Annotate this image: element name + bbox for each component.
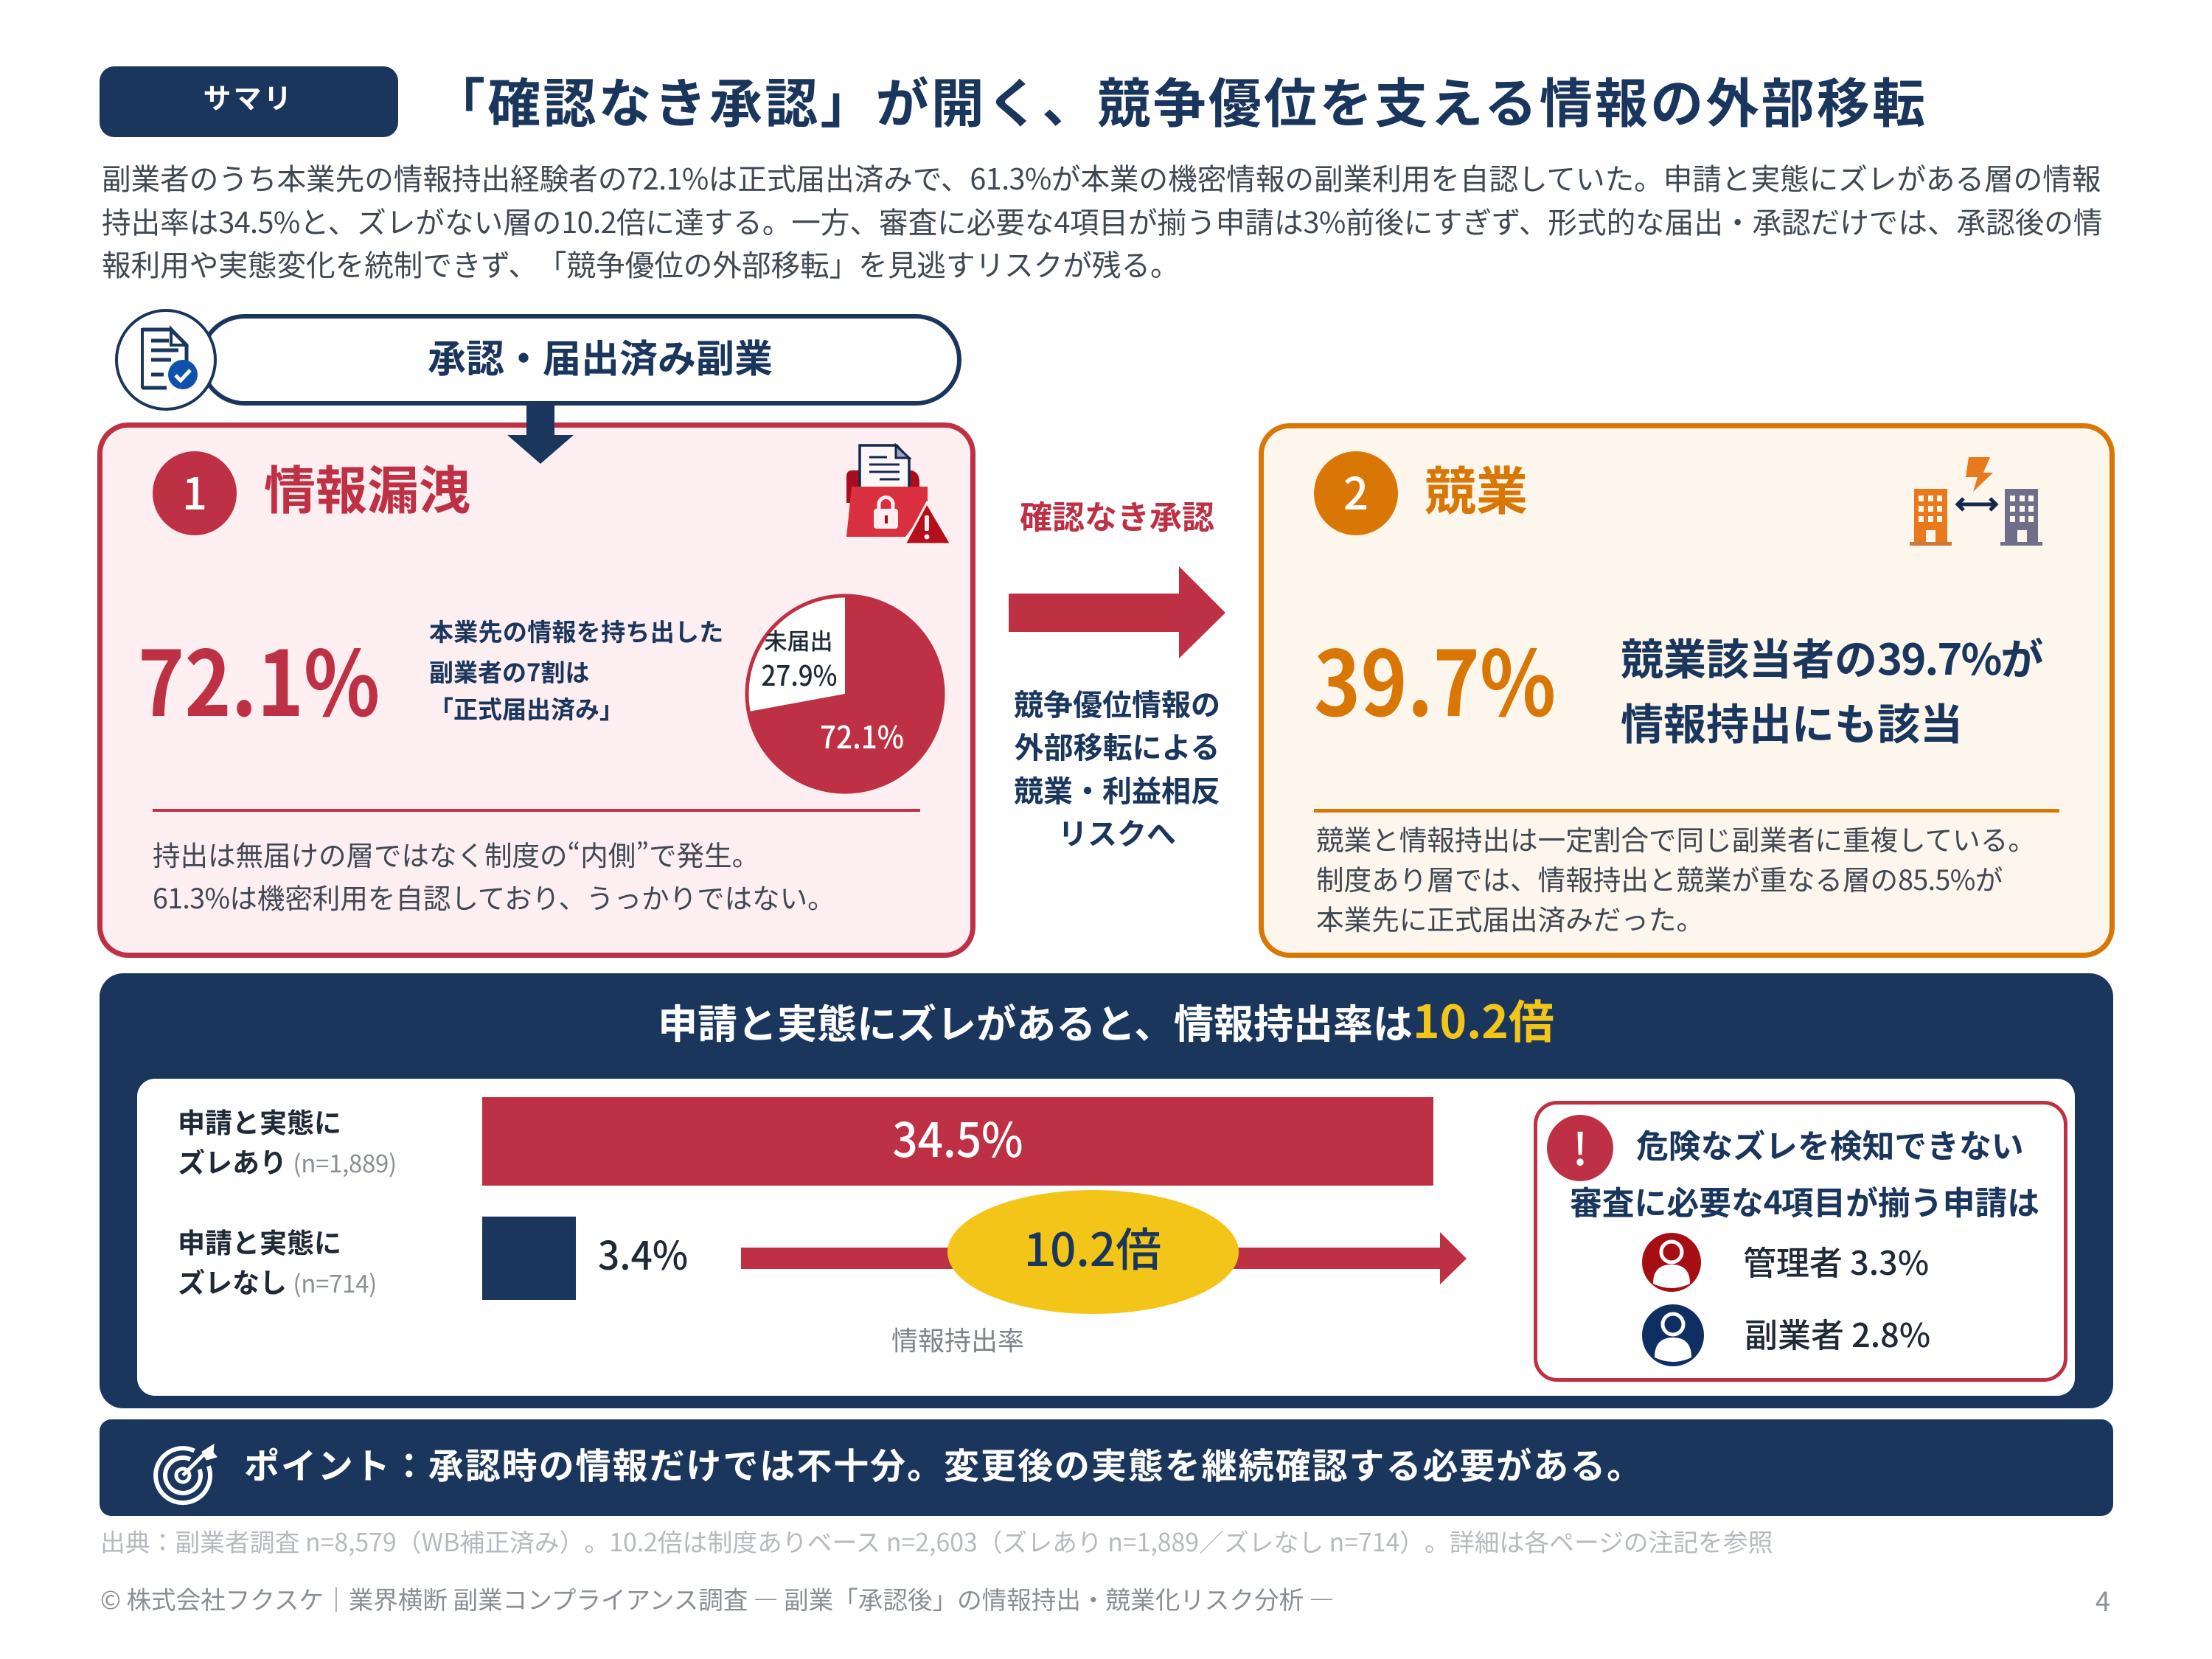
callout heading: 危険なズレを検知できない bbox=[1636, 1120, 2024, 1167]
connector text: 競争優位情報の bbox=[1014, 681, 1220, 724]
row label: with gap: 申請と実態に bbox=[178, 1101, 341, 1141]
big stat 72.1%: 72.1% bbox=[138, 612, 380, 742]
row label: with gap: ズレあり (n=1,889) bbox=[178, 1141, 397, 1180]
callout subheading: 審査に必要な4項目が揃う申請は bbox=[1570, 1177, 2039, 1224]
footer: © 株式会社フクスケ｜業界横断 副業コンプライアンス調査 — 副業「承認後」の情報持出・競業化リスク分析 — bbox=[100, 1580, 1334, 1616]
number badge 1: 1 bbox=[182, 459, 207, 523]
label: approval without confirmation: 確認なき承認 bbox=[1020, 491, 1214, 538]
pie label: not notified: 未届出 bbox=[764, 623, 833, 656]
connector text: 外部移転による bbox=[1015, 724, 1220, 767]
row label: with gap bbox=[178, 1101, 397, 1180]
note text: 競業と情報持出は一定割合で同じ副業者に重複している。 bbox=[1316, 818, 2036, 858]
panel heading: competing business: 競業 bbox=[1425, 451, 1528, 525]
icon: document with check bbox=[115, 309, 217, 411]
summary text block bbox=[102, 156, 2102, 285]
panel: key point bbox=[100, 1419, 2113, 1516]
icon: locked folder with warning bbox=[846, 442, 950, 543]
row label: without gap: 申請と実態に bbox=[178, 1221, 341, 1261]
arrow: ratio bbox=[741, 1232, 1467, 1284]
panel: gap comparison bbox=[100, 973, 2113, 1408]
panel: information leak bbox=[97, 422, 975, 958]
note text bbox=[1316, 818, 2036, 938]
stat: manager 3.3%: 管理者 3.3% bbox=[1743, 1237, 1929, 1284]
row label: without gap: ズレなし (n=714) bbox=[178, 1261, 377, 1301]
title: 「確認なき承認」が開く、競争優位を支える情報の外部移転 bbox=[432, 60, 1927, 138]
big stat 39.7%: 39.7% bbox=[1314, 612, 1556, 742]
pie label: not notified bbox=[761, 623, 838, 694]
number badge 2: 2 bbox=[1343, 459, 1368, 523]
connector text: 競業・利益相反 bbox=[1014, 768, 1220, 810]
bar: 34.5% bbox=[482, 1097, 1433, 1186]
note text: 61.3%は機密利用を自認しており、うっかりではない。 bbox=[153, 876, 835, 917]
icon: target bbox=[153, 1444, 218, 1506]
stat description: 本業先の情報を持ち出した bbox=[429, 613, 724, 648]
arrow: to panel 2 bbox=[1009, 566, 1225, 658]
pie label: not notified: 27.9% bbox=[761, 653, 838, 694]
stat description bbox=[429, 613, 724, 726]
pill: approved side jobs bbox=[199, 314, 961, 406]
stat description: 「正式届出済み」 bbox=[429, 690, 624, 726]
note text: 本業先に正式届出済みだった。 bbox=[1316, 897, 1704, 938]
number badge 1 bbox=[153, 451, 237, 535]
icon: two buildings with conflict bbox=[1910, 457, 2042, 546]
note text: 制度あり層では、情報持出と競業が重なる層の85.5%が bbox=[1316, 858, 2003, 898]
stat: side worker 2.8%: 副業者 2.8% bbox=[1745, 1309, 1930, 1357]
bar: 3.4% bbox=[482, 1217, 576, 1300]
stat description: 副業者の7割は bbox=[429, 653, 589, 689]
connector text: リスクへ bbox=[1058, 810, 1176, 853]
pie chart: notified share bbox=[745, 594, 945, 793]
pie label: notified: 72.1% bbox=[820, 713, 904, 758]
bar: 34.5%: 34.5% bbox=[892, 1103, 1023, 1171]
stat description: 情報持出にも該当 bbox=[1621, 690, 1963, 752]
number badge 2 bbox=[1314, 451, 1398, 535]
source note: 出典：副業者調査 n=8,579（WB補正済み）。10.2倍は制度ありベース n=2,603（ズレあり n=1,889／ズレなし n=714）。詳細は各ページの注記を参照 bbox=[100, 1523, 1773, 1559]
tag: summary: サマリ bbox=[203, 76, 294, 116]
icon: exclamation: ! bbox=[1573, 1114, 1587, 1178]
badge: 10.2x bbox=[947, 1190, 1239, 1314]
value: 3.4%: 3.4% bbox=[598, 1225, 688, 1281]
arrow: down to panel 1 bbox=[507, 406, 574, 464]
icon: side worker bbox=[1642, 1304, 1704, 1366]
point text: ポイント：承認時の情報だけでは不十分。変更後の実態を継続確認する必要がある。 bbox=[244, 1437, 1644, 1489]
callout: undetected gap bbox=[1534, 1101, 2067, 1382]
note text: 持出は無届けの層ではなく制度の“内側”で発生。 bbox=[153, 833, 759, 874]
page number: 4 bbox=[2096, 1581, 2110, 1619]
panel heading: information leak: 情報漏洩 bbox=[264, 450, 470, 524]
summary text block: 報利用や実態変化を統制できず、「競争優位の外部移転」を見逃すリスクが残る。 bbox=[102, 243, 1180, 285]
icon: manager bbox=[1642, 1233, 1701, 1292]
pill: approved side jobs: 承認・届出済み副業 bbox=[428, 328, 773, 383]
row label: without gap bbox=[178, 1221, 377, 1301]
panel: competing business bbox=[1259, 423, 2115, 958]
badge: 10.2x: 10.2倍 bbox=[1024, 1213, 1161, 1279]
white chart area bbox=[137, 1079, 2075, 1396]
summary text block: 持出率は34.5%と、ズレがない層の10.2倍に達する。一方、審査に必要な4項目が揃う申請は3%前後にすぎず、形式的な届出・承認だけでは、承認後の情 bbox=[102, 199, 2102, 242]
summary text block: 副業者のうち本業先の情報持出経験者の72.1%は正式届出済みで、61.3%が本業の機密情報の副業利用を自認していた。申請と実態にズレがある層の情報 bbox=[102, 156, 2101, 198]
icon: exclamation bbox=[1547, 1115, 1613, 1181]
heading: 10.2x: 申請と実態にズレがあると、情報持出率は10.2倍 bbox=[658, 985, 1554, 1051]
connector text bbox=[1014, 681, 1220, 853]
stat description bbox=[1621, 625, 2043, 752]
axis caption: 情報持出率 bbox=[891, 1320, 1024, 1358]
stat description: 競業該当者の39.7%が bbox=[1621, 625, 2043, 687]
tag: summary bbox=[100, 66, 398, 137]
note text bbox=[153, 833, 835, 917]
